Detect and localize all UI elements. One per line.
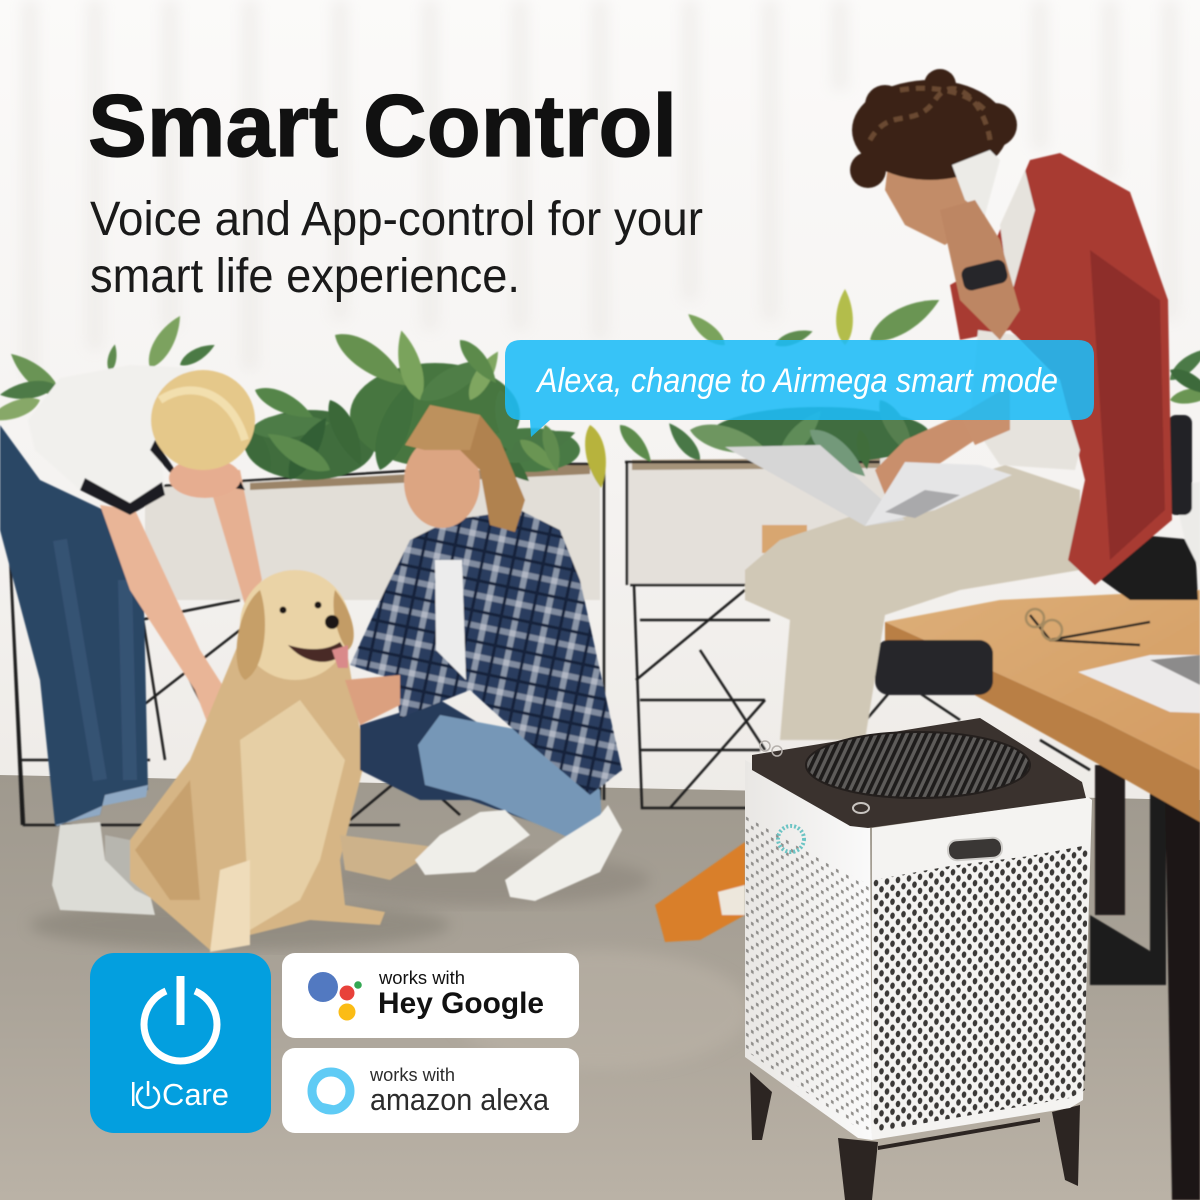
speech bubble xyxy=(505,340,1094,437)
woman: bending over dog xyxy=(0,365,262,915)
desk: wooden table with legs xyxy=(762,415,1200,1200)
IoCare wordmark xyxy=(132,1077,229,1112)
icon: Alexa ring xyxy=(312,1072,350,1114)
Hey Google text: Hey Google xyxy=(378,987,544,1020)
icon: power symbol xyxy=(144,976,217,1061)
subtitle: Voice and App-control for your xyxy=(90,193,703,246)
plants: left planter foliage xyxy=(0,311,611,490)
air purifier xyxy=(745,718,1092,1200)
man: crouching in plaid shirt xyxy=(345,405,622,901)
icon: Google Assistant dots xyxy=(308,972,362,1020)
Alexa text: works with xyxy=(369,1065,455,1085)
Hey Google text: works with xyxy=(378,968,465,988)
purifier top lid xyxy=(752,718,1086,828)
badge: works with Amazon Alexa xyxy=(282,1048,579,1133)
dog: golden retriever xyxy=(130,570,440,952)
Alexa text: amazon alexa xyxy=(370,1082,550,1117)
man: sitting on desk with phone and laptop xyxy=(655,69,1172,942)
title: Smart Control xyxy=(88,76,677,175)
purifier right face xyxy=(872,797,1092,1140)
planter: right box with wire frame xyxy=(625,458,1090,808)
planter: left box with wire frame xyxy=(10,462,604,825)
purifier left face xyxy=(745,760,872,1140)
purifier legs xyxy=(750,1072,1080,1200)
speech bubble: Alexa, change to Airmega smart mode xyxy=(535,362,1058,400)
Hey Google text xyxy=(378,968,544,1020)
plants: right planter foliage xyxy=(615,289,1200,484)
badge: works with Hey Google xyxy=(282,953,579,1038)
subtitle: smart life experience. xyxy=(90,250,520,303)
IoCare wordmark: Care xyxy=(162,1077,229,1112)
Alexa text xyxy=(369,1065,550,1117)
badge: IoCare app xyxy=(90,953,271,1133)
purifier air quality light ring xyxy=(778,826,804,852)
